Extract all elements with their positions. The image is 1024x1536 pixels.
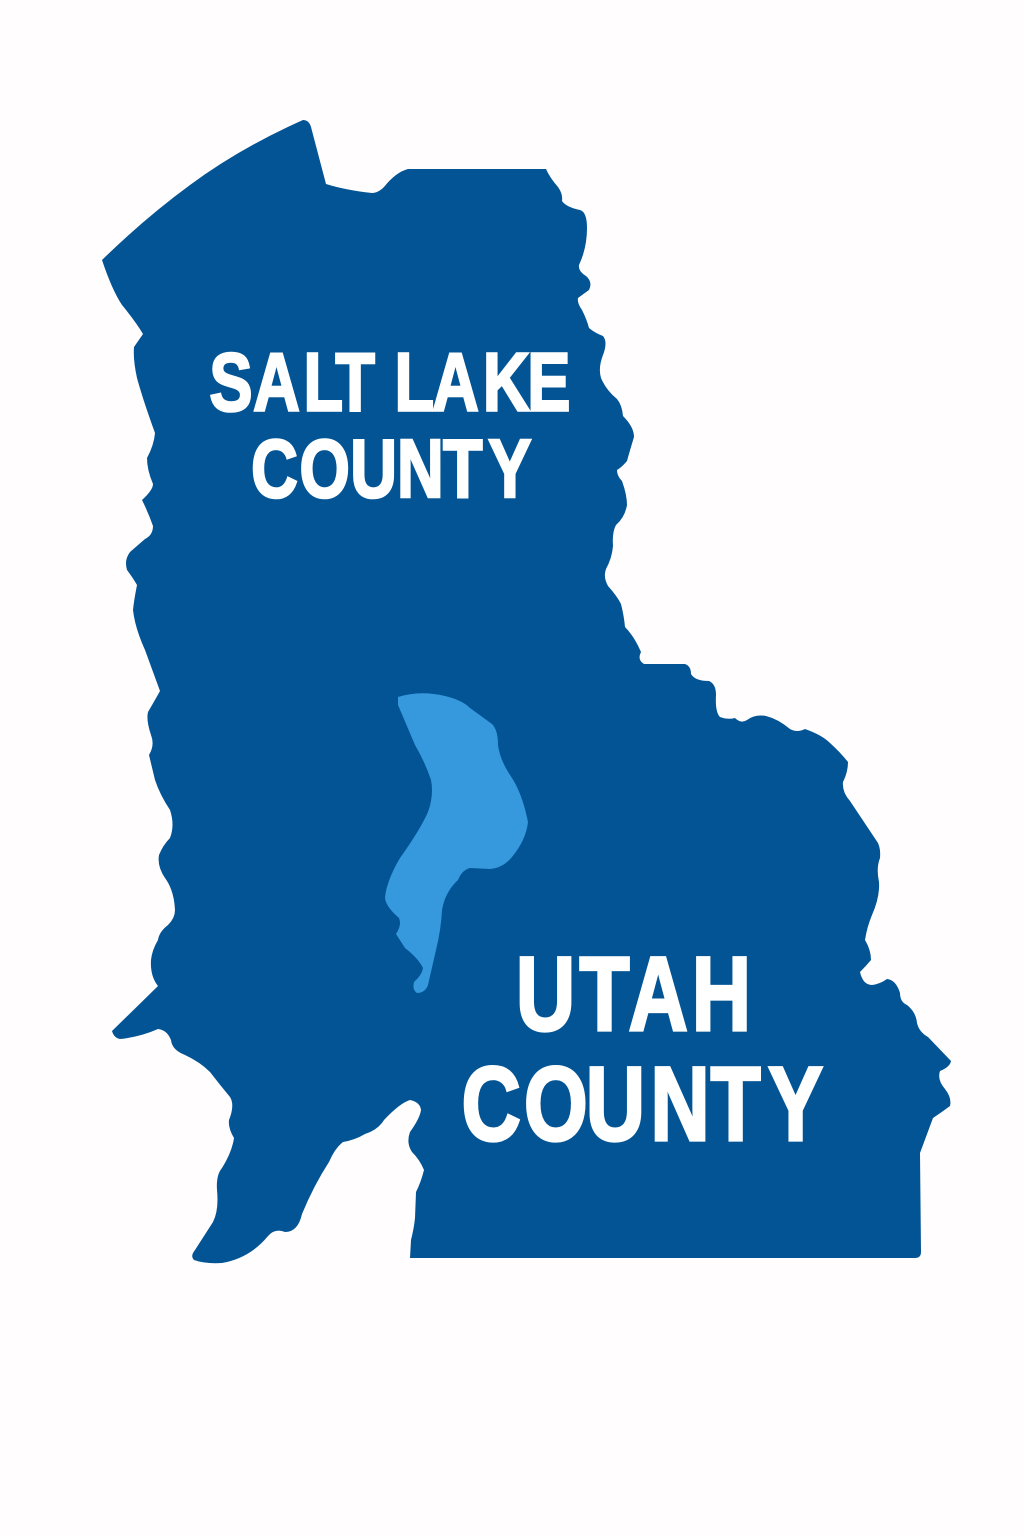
label: Salt Lake County: SALT LAKE	[209, 336, 570, 428]
label: Salt Lake County	[209, 336, 570, 515]
label: Utah County	[462, 935, 823, 1163]
label: Salt Lake County: COUNTY	[251, 422, 531, 515]
lake	[385, 693, 528, 993]
map: county silhouette	[102, 120, 951, 1263]
label: Utah County: UTAH	[516, 935, 751, 1053]
label: Utah County: COUNTY	[462, 1045, 823, 1163]
